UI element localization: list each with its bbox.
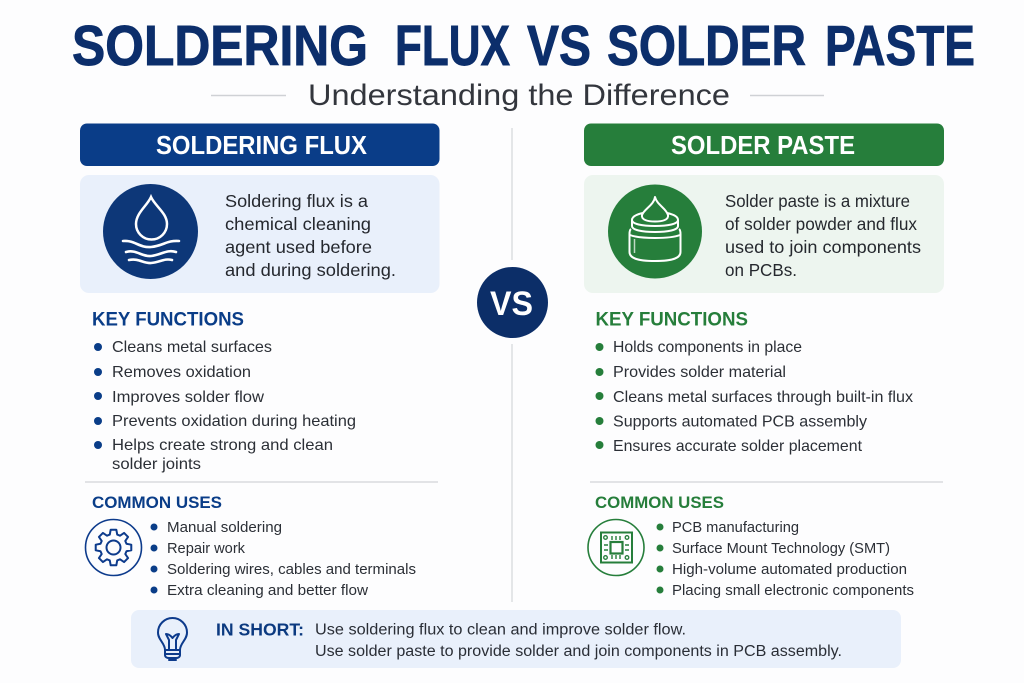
heading: solder paste xyxy=(584,124,944,166)
heading: soldering flux: SOLDERING FLUX xyxy=(156,132,367,160)
subtitle: Understanding the Difference xyxy=(308,79,730,112)
vs badge xyxy=(477,267,548,338)
common uses list: paste: Surface Mount Technology (SMT) xyxy=(672,540,890,557)
description: paste: on PCBs. xyxy=(725,260,797,280)
summary text: Use soldering flux to clean and improve solder flow. xyxy=(315,622,686,638)
heading: solder paste: SOLDER PASTE xyxy=(671,132,855,160)
description: flux: agent used before xyxy=(225,237,372,257)
common uses list: flux: Manual soldering xyxy=(167,519,282,536)
common uses heading: flux: COMMON USES xyxy=(92,493,222,512)
common uses list: flux: Soldering wires, cables and terminals xyxy=(167,561,416,578)
key functions list: paste: Holds components in place xyxy=(613,339,802,356)
definition card: flux xyxy=(80,175,440,293)
common uses heading: paste: COMMON USES xyxy=(595,493,724,512)
icon: circuit chip xyxy=(588,520,644,576)
common uses list: paste: High-volume automated production xyxy=(672,561,907,578)
title: FLUX xyxy=(395,14,510,78)
description: paste: used to join components xyxy=(725,237,921,257)
common uses list: flux: Extra cleaning and better flow xyxy=(167,582,368,599)
key functions list: paste: Provides solder material xyxy=(613,364,786,381)
description: flux xyxy=(225,191,396,280)
title: SOLDER xyxy=(607,14,806,78)
icon: water drop xyxy=(103,184,198,279)
key functions list: flux: Helps create strong and clean xyxy=(112,437,333,454)
panel: solder paste xyxy=(584,124,944,599)
icon: paste jar xyxy=(608,184,702,278)
key functions heading: flux: KEY FUNCTIONS xyxy=(92,310,244,330)
title: PASTE xyxy=(825,14,975,78)
description: paste xyxy=(725,191,921,280)
key functions list: flux: Cleans metal surfaces xyxy=(112,339,272,356)
panel: soldering flux xyxy=(80,124,440,599)
icon: gear xyxy=(86,520,142,576)
label: in short: IN SHORT: xyxy=(216,620,304,640)
summary text xyxy=(315,622,842,660)
key functions list: paste xyxy=(596,339,913,455)
key functions list: flux: Removes oxidation xyxy=(112,364,251,381)
title xyxy=(72,14,975,78)
description: flux: Soldering flux is a xyxy=(225,191,368,211)
description: paste: of solder powder and flux xyxy=(725,214,917,234)
description: flux: chemical cleaning xyxy=(225,214,371,234)
key functions heading: paste: KEY FUNCTIONS xyxy=(596,310,748,330)
key functions list: flux: Improves solder flow xyxy=(112,389,264,406)
summary text: Use solder paste to provide solder and join components in PCB assembly. xyxy=(315,643,842,660)
common uses list: flux xyxy=(150,519,416,599)
key functions list: paste: Supports automated PCB assembly xyxy=(613,414,867,430)
heading: soldering flux xyxy=(80,124,440,166)
common uses list: flux: Repair work xyxy=(167,540,245,557)
key functions list: flux xyxy=(94,339,356,473)
key functions list: flux: solder joints xyxy=(112,456,201,473)
title: VS xyxy=(527,14,591,78)
common uses list: paste: Placing small electronic components xyxy=(672,582,914,599)
callout: in short xyxy=(131,610,901,668)
icon: light bulb xyxy=(158,618,187,660)
title: SOLDERING xyxy=(72,14,368,78)
description: flux: and during soldering. xyxy=(225,260,396,280)
key functions list: flux: Prevents oxidation during heating xyxy=(112,413,356,430)
description: paste: Solder paste is a mixture xyxy=(725,191,910,211)
key functions list: paste: Ensures accurate solder placement xyxy=(613,438,863,455)
vs badge: VS xyxy=(490,285,533,323)
definition card: paste xyxy=(584,175,944,293)
common uses list: paste: PCB manufacturing xyxy=(672,519,799,536)
key functions list: paste: Cleans metal surfaces through built-in flux xyxy=(613,389,913,406)
common uses list: paste xyxy=(656,519,914,599)
